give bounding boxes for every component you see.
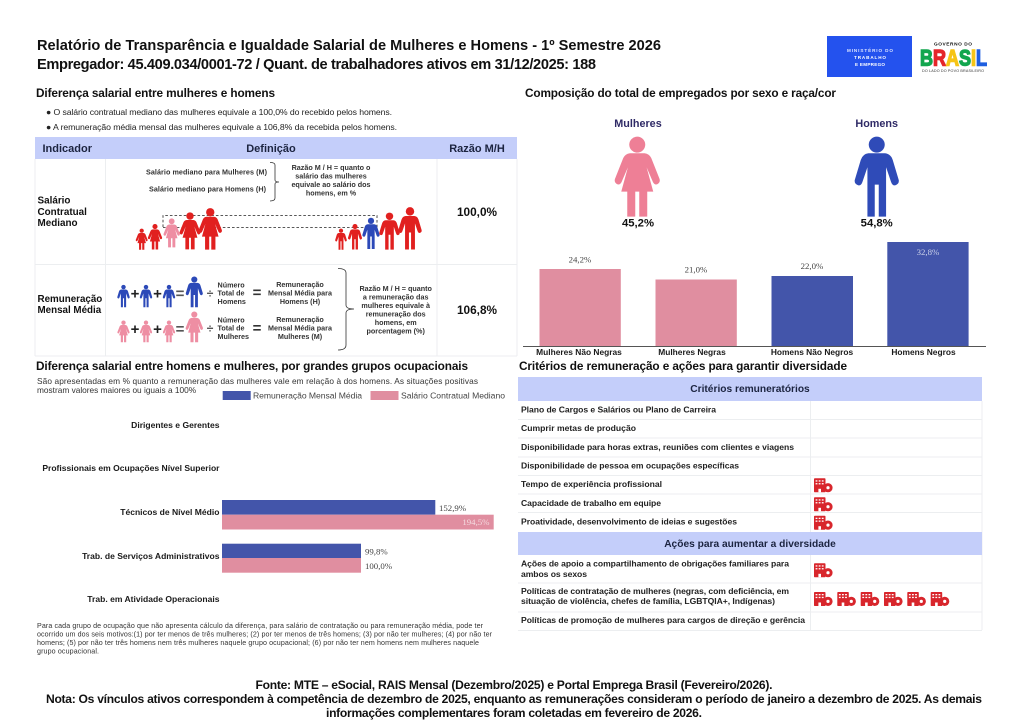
figure: mulheres xyxy=(614,118,662,230)
formula: mulheres: Total de xyxy=(218,324,245,332)
formula: homens: Mensal Média para xyxy=(268,288,333,298)
formula: mulheres: = xyxy=(253,320,262,337)
definition: razão remuneração: homens, em xyxy=(375,318,417,327)
formula: homens: Homens xyxy=(218,297,246,306)
criteria list: Proatividade, desenvolvimento de ideias e sugestões xyxy=(521,517,737,527)
bar chart: composição por sexo e raça/cor: Homens Não Negros xyxy=(771,347,854,357)
text block: descrição do gráfico xyxy=(37,376,478,395)
figure: mulheres: Mulheres xyxy=(614,118,662,130)
formula: homens: = xyxy=(253,284,262,302)
text block: descrição do gráfico: mostram valores maiores ou iguais a 100% xyxy=(37,385,197,395)
criteria list: Cumprir metas de produção xyxy=(521,423,636,433)
text block: destaques: ● A remuneração média mensal das mulheres equivale a 106,8% da recebida pelos homens. xyxy=(46,122,397,132)
panel: tabela de indicadores xyxy=(35,137,517,356)
legend xyxy=(223,390,505,400)
actions list: situação de violência, chefes de família, LGBTQIA+, Indígenas) xyxy=(521,596,775,606)
text block: nota de rodapé do gráfico: grupo ocupacional. xyxy=(37,648,99,656)
legend: Remuneração Mensal Média xyxy=(253,390,362,400)
legend: Salário Contratual Mediano xyxy=(401,390,505,400)
criteria list: Disponibilidade de pessoa em ocupações específicas xyxy=(521,461,739,471)
definition: razão remuneração: Razão M / H = quanto xyxy=(359,284,433,293)
definition: razão remuneração: remuneração dos xyxy=(366,310,426,318)
table header: critérios remuneratórios: Critérios remuneratórios xyxy=(690,384,810,395)
bar chart: grupos ocupacionais: 152,9% xyxy=(439,503,467,513)
definition: salário mediano: Razão M / H = quanto o xyxy=(292,163,371,172)
value: 106,8%: 106,8% xyxy=(457,303,498,317)
table header: Definição xyxy=(246,143,296,155)
row label: remuneração mensal média: Mensal Média xyxy=(38,305,102,316)
bar chart: composição por sexo e raça/cor: Mulheres Negras xyxy=(658,347,726,357)
illustration: mediana das mulheres e homens xyxy=(136,207,422,250)
actions list xyxy=(521,559,805,625)
icons: ações adotadas xyxy=(814,563,949,606)
definition: salário mediano: Salário mediano para Homens (H) xyxy=(149,184,267,194)
title xyxy=(37,38,661,73)
title: Empregador: 45.409.034/0001-72 / Quant. de trabalhadores ativos em 31/12/2025: 188 xyxy=(37,57,596,73)
table header: ações xyxy=(518,532,982,555)
formula: mulheres: = xyxy=(176,321,185,338)
definition: salário mediano: Salário mediano para Mulheres (M) xyxy=(146,168,268,176)
table header: ações: Ações para aumentar a diversidade xyxy=(664,539,836,550)
formula: homens: Número xyxy=(218,280,245,290)
table header: critérios remuneratórios xyxy=(518,377,982,401)
bar chart: grupos ocupacionais: Dirigentes e Gerentes xyxy=(131,420,220,430)
formula: homens: + xyxy=(153,286,162,302)
text block: descrição do gráfico: São apresentadas em % quanto a remuneração das mulheres vale em relação à dos homens. As situações positivas xyxy=(37,376,478,386)
bar chart: grupos ocupacionais: Trab. de Serviços Administrativos xyxy=(82,551,220,561)
formula: mulheres xyxy=(117,311,333,342)
panel: critérios de remuneração e ações xyxy=(518,377,982,630)
formula: mulheres: Mulheres xyxy=(218,332,249,341)
heading: diferença por grupos ocupacionais: Diferença salarial entre homens e mulheres, por grandes grupos ocupacionais xyxy=(36,359,468,373)
icons: critérios adotados xyxy=(814,478,833,530)
heading: composição: Composição do total de empregados por sexo e raça/cor xyxy=(525,86,836,100)
bar chart: grupos ocupacionais: 100,0% xyxy=(365,561,393,571)
definition: salário mediano: homens, em % xyxy=(306,188,357,198)
text block: destaques: ● O salário contratual mediano das mulheres equivale a 100,0% do recebido pelos homens. xyxy=(46,107,392,117)
figure: homens xyxy=(855,118,899,230)
bar chart: grupos ocupacionais: Técnicos de Nível Médio xyxy=(120,507,220,517)
formula: mulheres: + xyxy=(153,321,162,338)
formula: mulheres: Mensal Média para xyxy=(268,324,333,332)
formula: homens: + xyxy=(131,286,140,302)
formula: homens: Remuneração xyxy=(276,280,324,289)
footer: fonte e nota: informações complementares foram coletadas em fevereiro de 2026. xyxy=(326,706,702,720)
figure: homens: 54,8% xyxy=(861,218,893,230)
logo: ministério do trabalho e emprego: TRABALHO xyxy=(854,55,886,60)
logo: ministério do trabalho e emprego xyxy=(827,36,912,77)
row label: remuneração mensal média xyxy=(38,294,102,316)
bar chart: composição por sexo e raça/cor: 32,8% xyxy=(917,247,940,257)
actions list: Políticas de promoção de mulheres para cargos de direção e gerência xyxy=(521,615,805,625)
logo: ministério do trabalho e emprego: MINISTÉRIO DO xyxy=(847,46,893,53)
bar chart: composição por sexo e raça/cor: Homens Negros xyxy=(891,347,956,357)
actions list: Políticas de contratação de mulheres (negras, com deficiência, em xyxy=(521,586,789,596)
definition: salário mediano: equivale ao salário dos xyxy=(291,180,371,189)
definition: razão remuneração: mulheres equivale à xyxy=(361,301,431,310)
figure: homens: Homens xyxy=(855,118,898,130)
formula: homens: Total de xyxy=(218,288,245,298)
heading: critérios: Critérios de remuneração e ações para garantir diversidade xyxy=(519,359,847,373)
bar chart: composição por sexo e raça/cor: 22,0% xyxy=(801,261,824,271)
bar chart: grupos ocupacionais xyxy=(42,420,494,604)
criteria list: Disponibilidade para horas extras, reuniões com clientes e viagens xyxy=(521,442,794,452)
text block: nota de rodapé do gráfico: Para cada grupo de ocupação que não apresenta cálculo da diferença, para salário de contratação ou para remuneração média, pode ter xyxy=(37,622,484,630)
text block: nota de rodapé do gráfico: ocorrido um dos seis motivos:(1) por ter menos de três mulheres; (2) por ter menos de três homens; (3) por não ter mulheres; (4) por não ter xyxy=(37,631,493,639)
actions list: ambos os sexos xyxy=(521,569,587,579)
formula: mulheres: Número xyxy=(218,316,245,324)
definition: razão remuneração: a remuneração das xyxy=(363,293,428,302)
row label: remuneração mensal média: Remuneração xyxy=(38,294,102,305)
logo: governo do brasil: GOVERNO DO xyxy=(934,42,972,48)
bar chart: grupos ocupacionais: 99,8% xyxy=(365,546,388,556)
bar chart: grupos ocupacionais: Profissionais em Ocupações Nível Superior xyxy=(42,463,220,473)
definition: razão remuneração: porcentagem (%) xyxy=(367,327,425,336)
definition: razão remuneração xyxy=(338,268,433,350)
definition: salário mediano xyxy=(146,162,371,201)
row label: salário contratual mediano: Mediano xyxy=(38,218,78,229)
bar chart: composição por sexo e raça/cor: Mulheres Não Negras xyxy=(536,347,622,357)
logo: governo do brasil: DO LADO DO POVO BRASILEIRO xyxy=(922,69,984,73)
formula: mulheres: Mulheres (M) xyxy=(278,332,323,341)
row label: salário contratual mediano: Contratual xyxy=(38,207,87,218)
bar chart: composição por sexo e raça/cor xyxy=(523,242,986,357)
footer: fonte e nota: Nota: Os vínculos ativos correspondem à competência de dezembro de 2025, enquanto as remunerações consideram o período de janeiro a dezembro de 2025. As demais xyxy=(46,692,982,706)
footer: fonte e nota: Fonte: MTE – eSocial, RAIS Mensal (Dezembro/2025) e Portal Emprega Brasil (Fevereiro/2026). xyxy=(256,678,772,692)
heading: diferença salarial: Diferença salarial entre mulheres e homens xyxy=(36,86,275,100)
formula: mulheres: + xyxy=(131,321,140,338)
criteria list: Capacidade de trabalho em equipe xyxy=(521,498,661,508)
table header xyxy=(35,137,517,159)
criteria list: Tempo de experiência profissional xyxy=(521,479,662,489)
bar chart: composição por sexo e raça/cor: 21,0% xyxy=(685,264,708,274)
formula: mulheres: Remuneração xyxy=(276,315,324,324)
title: Relatório de Transparência e Igualdade Salarial de Mulheres e Homens - 1º Semestre 2026 xyxy=(37,38,661,54)
bar chart: grupos ocupacionais: 194,5% xyxy=(462,517,490,527)
text block: destaques xyxy=(46,107,397,132)
logo: ministério do trabalho e emprego: E EMPREGO xyxy=(855,62,885,67)
definition: salário mediano: salário das mulheres xyxy=(295,172,367,180)
bar chart: grupos ocupacionais: Trab. em Atividade Operacionais xyxy=(87,594,220,604)
figure: mulheres: 45,2% xyxy=(622,218,654,230)
table header: Indicador xyxy=(42,143,93,155)
logo: governo do brasil: BRASIL xyxy=(920,46,987,70)
formula: homens: ÷ xyxy=(207,286,214,300)
text block: nota de rodapé do gráfico xyxy=(37,622,493,656)
actions list: Ações de apoio a compartilhamento de obrigações familiares para xyxy=(521,559,789,569)
criteria list: Plano de Cargos e Salários ou Plano de Carreira xyxy=(521,404,716,414)
value: 100,0%: 100,0% xyxy=(457,205,498,219)
text block: nota de rodapé do gráfico: homens; (5) por não ter três homens nem três mulheres naquele grupo ocupacional; (6) por não ter nem homens nem mulheres naquele xyxy=(37,639,479,647)
row label: salário contratual mediano: Salário xyxy=(38,196,70,206)
formula: homens xyxy=(117,276,333,307)
criteria list xyxy=(521,404,794,527)
bar chart: composição por sexo e raça/cor: 24,2% xyxy=(569,254,592,264)
formula: mulheres: ÷ xyxy=(207,322,214,336)
formula: homens: = xyxy=(176,286,185,302)
row label: salário contratual mediano xyxy=(38,196,87,229)
footer: fonte e nota xyxy=(46,678,982,720)
formula: homens: Homens (H) xyxy=(280,297,321,306)
table header: Razão M/H xyxy=(449,143,505,155)
